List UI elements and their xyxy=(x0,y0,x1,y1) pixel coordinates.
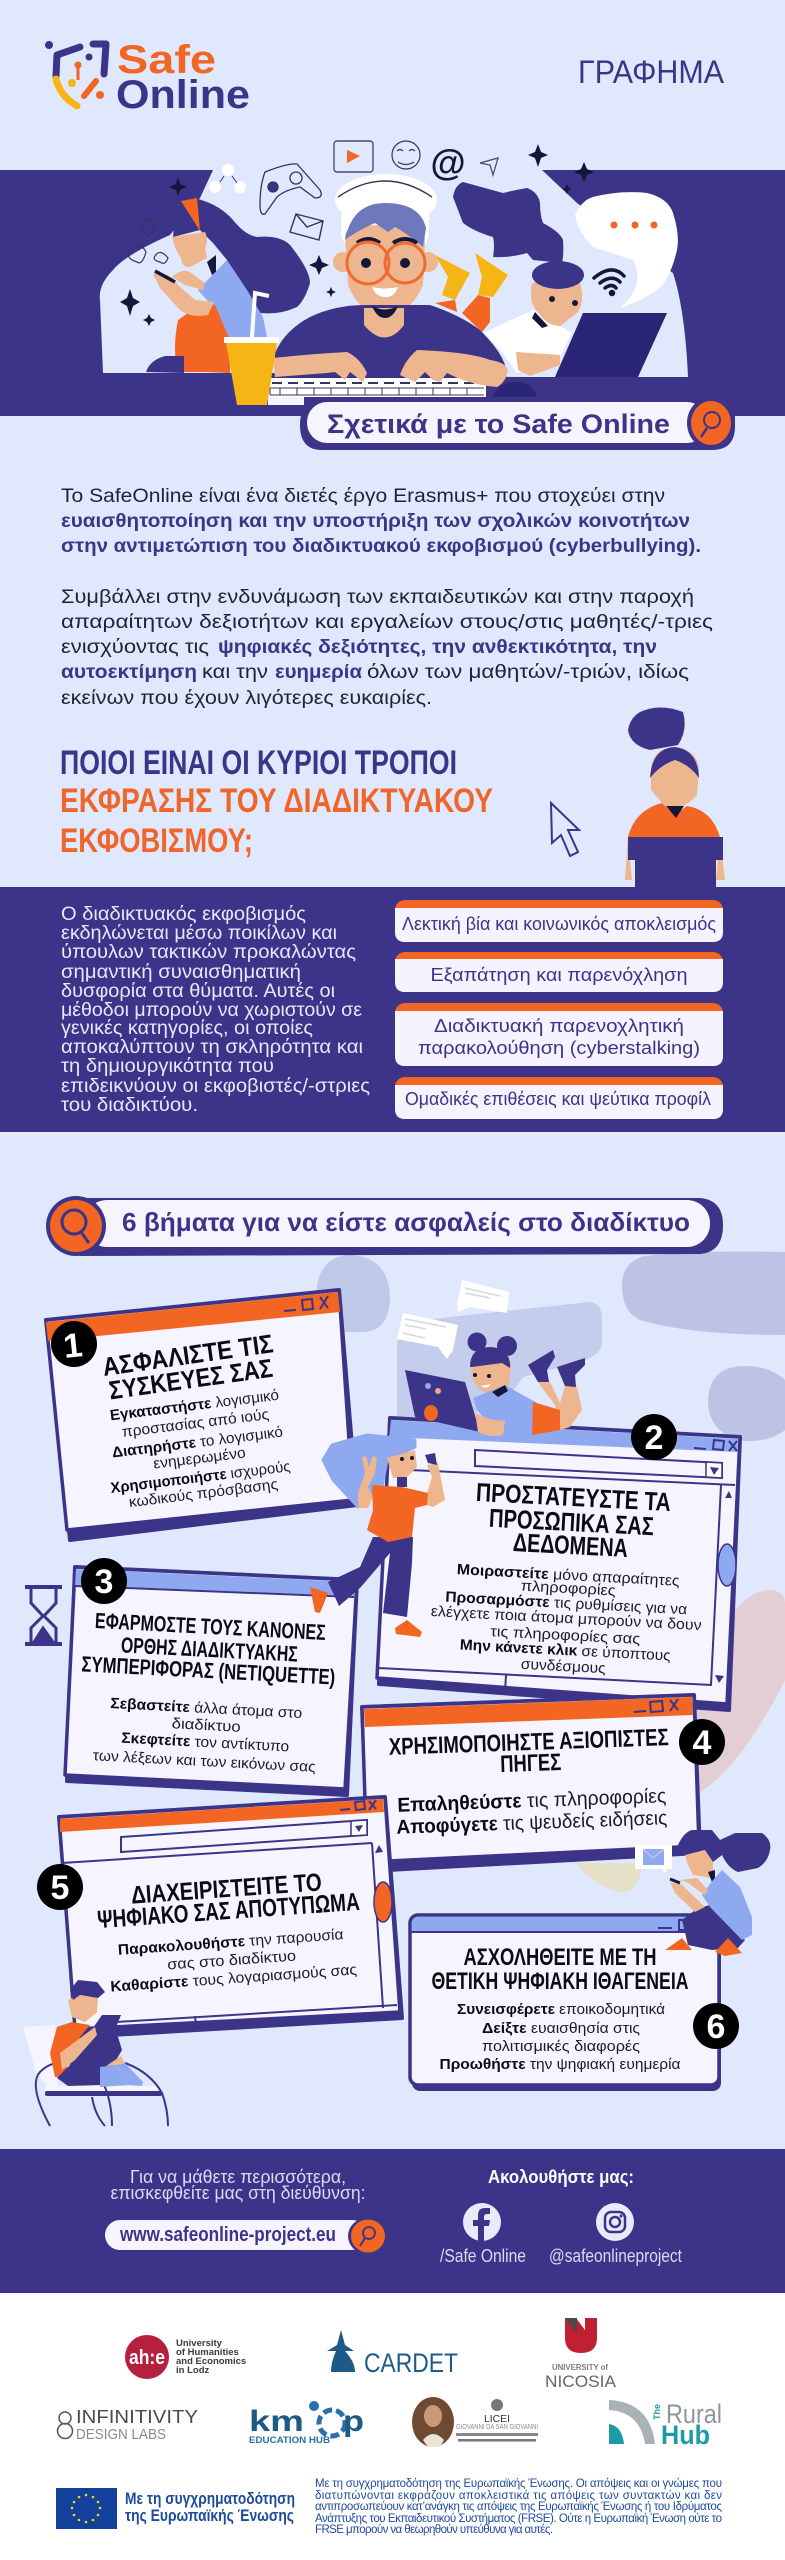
number badge 6: 6 xyxy=(707,2008,725,2046)
card: cyberstalking: Διαδικτυακή παρενοχλητική xyxy=(434,1016,684,1036)
panel: cyberbullying forms band xyxy=(0,887,785,1132)
logo: University of Nicosia xyxy=(545,2318,617,2391)
logo: KMOP: EDUCATION HUB xyxy=(249,2435,331,2445)
explanation text: τη δημιουργικότητα που xyxy=(61,1056,274,1077)
logo: AHE xyxy=(125,2335,246,2379)
icon: cursor arrow xyxy=(551,803,579,856)
white partner area xyxy=(0,2293,785,2560)
heading: main forms of cyberbullying: ΕΚΦΡΑΣΗΣ ΤΟΥ ΔΙΑΔΙΚΤΥΑΚΟΥ xyxy=(60,782,493,820)
card: cyberstalking: παρακολούθηση (cyberstalking) xyxy=(418,1038,700,1058)
logo: Licei Giovanni da San Giovanni: LICEI xyxy=(484,2414,510,2425)
body text: των λέξεων και των εικόνων σας xyxy=(92,1747,316,1776)
text: follow us: Ακολουθήστε μας: xyxy=(488,2167,634,2187)
card: cyberstalking xyxy=(395,1003,723,1066)
number badge 4: 4 xyxy=(693,1724,712,1762)
body text: κωδικούς πρόσβασης xyxy=(128,1476,279,1511)
EU co-funding emblem xyxy=(56,2488,295,2529)
social handles xyxy=(440,2246,682,2266)
title xyxy=(475,1477,672,1563)
number badge 5 xyxy=(37,1864,83,1910)
drink cup xyxy=(224,293,279,405)
person: girl standing with phone xyxy=(310,1435,445,1637)
section heading: six steps: 6 βήματα για να είστε ασφαλείς στο διαδίκτυο xyxy=(122,1207,690,1237)
logo: AHE: in Lodz xyxy=(176,2365,209,2376)
logo: The Rural Hub: The xyxy=(652,2404,662,2420)
icon: smiley xyxy=(392,141,420,169)
logo: AHE: of Humanities xyxy=(176,2347,239,2358)
body text: πολιτισμικές διαφορές xyxy=(482,2038,640,2055)
title: ΧΡΗΣΙΜΟΠΟΙΗΣΤΕ ΑΞΙΟΠΙΣΤΕΣ xyxy=(388,1724,669,1761)
intro text block: εκείνων που έχουν λιγότερες ευκαιρίες. xyxy=(61,688,432,709)
body text: Συνεισφέρετε εποικοδομητικά xyxy=(457,2001,665,2018)
body text: πληροφορίες xyxy=(520,1578,616,1599)
website search bar xyxy=(105,2218,386,2254)
social handles: /Safe Online xyxy=(440,2246,526,2266)
number badge 6 xyxy=(693,2003,739,2049)
logo: CARDET xyxy=(327,2330,458,2378)
logo: KMOP: km xyxy=(249,2405,304,2438)
title: ΕΦΑΡΜΟΣΤΕ ΤΟΥΣ ΚΑΝΟΝΕΣ xyxy=(94,1608,326,1645)
intro text block: αυτοεκτίμηση xyxy=(61,662,197,683)
body text: Μην κάνετε κλικ σε ύποπτους xyxy=(459,1636,671,1665)
explanation text: γενικές κατηγορίες, οι οποίες xyxy=(61,1018,313,1039)
intro text block: Συμβάλλει στην ενδυνάμωση των εκπαιδευτικών και στην παροχή xyxy=(61,587,694,608)
intro text block: και την xyxy=(202,662,268,683)
title: ΠΡΟΣΤΑΤΕΥΣΤΕ ΤΑ xyxy=(475,1477,672,1517)
body text: Παρακολουθήστε την παρουσία xyxy=(117,1926,344,1959)
icon: hourglass xyxy=(25,1587,62,1644)
body text: Χρησιμοποιήστε ισχυρούς xyxy=(110,1458,291,1497)
text: learn more: Για να μάθετε περισσότερα, xyxy=(130,2167,346,2187)
logo: CARDET: CARDET xyxy=(364,2348,458,2378)
EU co-funding emblem: Με τη συγχρηματοδότηση xyxy=(125,2489,295,2508)
EU co-funding emblem: της Ευρωπαϊκής Ένωσης xyxy=(125,2506,294,2525)
logo: Infinitivity Design Labs: DESIGN LABS xyxy=(76,2426,166,2443)
title: ΟΡΘΗΣ ΔΙΑΔΙΚΤΥΑΚΗΣ xyxy=(120,1632,298,1667)
heading: main forms of cyberbullying: ΕΚΦΟΒΙΣΜΟΥ; xyxy=(60,822,253,860)
person: girl sitting with phone and message xyxy=(635,1830,770,1956)
body text: Προσαρμόστε τις ρυθμίσεις για να xyxy=(445,1589,688,1618)
explanation text: επιδεικνύουν οι εκφοβιστές/-στριες xyxy=(61,1076,370,1097)
explanation text: αποκαλύπτουν τη σκληρότητα και xyxy=(61,1037,363,1058)
icon: instagram xyxy=(596,2203,634,2241)
window 2: protect personal data xyxy=(377,1418,740,1710)
central boy at keyboard xyxy=(268,174,537,405)
explanation text: του διαδικτύου. xyxy=(61,1095,198,1116)
number badge 3 xyxy=(81,1558,127,1604)
body text: Καθαρίστε τους λογαριασμούς σας xyxy=(110,1961,357,1996)
body text: ενημερωμένο xyxy=(152,1444,247,1473)
body text xyxy=(92,1695,316,1776)
body text xyxy=(430,1561,702,1677)
body text: προστασίας από ιούς xyxy=(121,1406,270,1441)
card: group attacks xyxy=(395,1077,723,1119)
logo: The Rural Hub: Hub xyxy=(661,2420,710,2450)
logo: AHE: University xyxy=(176,2338,223,2349)
title xyxy=(100,1328,275,1405)
intro text block: ψηφιακές δεξιότητες, την ανθεκτικότητα, την xyxy=(218,637,657,658)
keyboard xyxy=(268,378,486,405)
body text: Σεβαστείτε άλλα άτομα στο xyxy=(110,1695,303,1722)
social handles: @safeonlineproject xyxy=(549,2246,682,2266)
intro text block: Το SafeOnline είναι ένα διετές έργο Erasmus+ που στοχεύει στην xyxy=(61,486,665,507)
text: learn more xyxy=(110,2167,366,2203)
body text xyxy=(110,1926,357,1996)
number badge 5: 5 xyxy=(51,1869,69,1907)
intro text block: απαραίτητων δεξιοτήτων και εργαλείων στους/στις μαθητές/-τριες xyxy=(61,612,713,633)
explanation text xyxy=(61,904,370,1116)
title: ΣΥΜΠΕΡΙΦΟΡΑΣ (NETIQUETTE) xyxy=(81,1651,336,1690)
explanation text: μέθοδοι μπορούν να χωριστούν σε xyxy=(61,1000,363,1021)
logo: KMOP: p xyxy=(343,2405,364,2438)
title: ΣΥΣΚΕΥΕΣ ΣΑΣ xyxy=(107,1353,275,1405)
intro text block: ευαισθητοποίηση και την υποστήριξη των σχολικών κοινοτήτων xyxy=(61,511,690,532)
card: deception xyxy=(395,952,723,992)
body text: Εγκαταστήστε λογισμικό xyxy=(109,1387,280,1424)
number badge 1 xyxy=(51,1321,97,1367)
text: learn more: επισκεφθείτε μας στη διεύθυνση: xyxy=(110,2183,366,2203)
body text xyxy=(396,1785,668,1839)
explanation text: σημαντική συναισθηματική xyxy=(61,962,301,983)
window 5: digital footprint xyxy=(59,1797,402,2037)
explanation text: δυσφορία στα θύματα. Αυτές οι xyxy=(61,981,335,1002)
title: ΘΕΤΙΚΗ ΨΗΦΙΑΚΗ ΙΘΑΓΕΝΕΙΑ xyxy=(432,1968,688,1995)
number badge 2: 2 xyxy=(645,1419,663,1457)
search bar heading: about xyxy=(300,397,735,450)
heading: main forms of cyberbullying: ΠΟΙΟΙ ΕΙΝΑΙ ΟΙ ΚΥΡΙΟΙ ΤΡΟΠΟΙ xyxy=(60,744,457,782)
logo: The Rural Hub: Rural xyxy=(666,2399,722,2429)
logo: AHE: ah:e xyxy=(129,2347,165,2369)
window 4: reliable sources xyxy=(362,1695,700,1871)
body text: Δείξτε ευαισθησία στις xyxy=(482,2020,640,2037)
title: ΔΙΑΧΕΙΡΙΣΤΕΙΤΕ ΤΟ xyxy=(130,1868,323,1910)
intro text block: ευημερία xyxy=(275,662,362,683)
icon: facebook xyxy=(463,2203,501,2241)
body text xyxy=(440,2001,681,2073)
background blobs xyxy=(316,1252,785,1892)
logo: Licei Giovanni da San Giovanni xyxy=(412,2397,538,2447)
body text: Επαληθεύστε τις πληροφορίες xyxy=(397,1785,667,1817)
logo: Safe Online: Online xyxy=(116,73,250,117)
title: ΔΕΔΟΜΕΝΑ xyxy=(512,1527,629,1563)
number badge 4 xyxy=(679,1719,725,1765)
logo: Safe Online: Safe xyxy=(117,38,216,82)
explanation text: εκδηλώνεται μέσω ποικίλων και xyxy=(61,923,337,944)
window 1: secure devices xyxy=(46,1290,357,1540)
disclaimer text xyxy=(315,2478,722,2536)
logo: University of Nicosia: UNIVERSITY of xyxy=(552,2363,608,2372)
footer band xyxy=(0,2149,785,2293)
icon: game controller xyxy=(260,164,321,214)
person: girl lying on laptop xyxy=(397,1280,585,1437)
logo: University of Nicosia: NICOSIA xyxy=(545,2372,617,2391)
body text: διαδίκτυο xyxy=(171,1715,241,1736)
logo: Infinitivity Design Labs xyxy=(58,2407,198,2443)
woman at laptop xyxy=(625,708,725,887)
label: document type: ΓΡΑΦΗΜΑ xyxy=(578,54,725,90)
title: ΨΗΦΙΑΚΟ ΣΑΣ ΑΠΟΤΥΠΩΜΑ xyxy=(96,1888,361,1934)
intro text block: στην αντιμετώπιση του διαδικτυακού εκφοβισμού (cyberbullying). xyxy=(61,536,701,557)
title: ΑΣΦΑΛΙΣΤΕ ΤΙΣ xyxy=(100,1328,275,1382)
icon: paper plane xyxy=(480,158,498,175)
logo: Licei Giovanni da San Giovanni: GIOVANNI DA SAN GIOVANNI xyxy=(456,2424,538,2431)
body text: σας στο διαδίκτυο xyxy=(167,1948,297,1973)
icon: share nodes xyxy=(209,164,246,193)
title: ΑΣΧΟΛΗΘΕΙΤΕ ΜΕ ΤΗ xyxy=(464,1944,656,1971)
card: verbal violence xyxy=(395,900,723,942)
left girl with phone xyxy=(129,198,310,373)
icon: wifi xyxy=(594,270,624,294)
logo: AHE: and Economics xyxy=(176,2356,246,2367)
logo: The Rural Hub xyxy=(609,2399,722,2450)
window 6: positive digital citizenship xyxy=(410,1915,721,2091)
body text: τις πληροφορίες σας xyxy=(490,1623,641,1648)
number badge 1: 1 xyxy=(61,1326,84,1366)
title xyxy=(81,1608,336,1690)
explanation text: Ο διαδικτυακός εκφοβισμός xyxy=(61,904,306,925)
card: group attacks: Ομαδικές επιθέσεις και ψεύτικα προφίλ xyxy=(405,1089,711,1109)
disclaimer text: αντιπροσωπεύουν κατ’ανάγκη τις απόψεις της Ευρωπαϊκής Ένωσης ή του Ιδρύματος xyxy=(315,2501,722,2513)
disclaimer text: Ανάπτυξης του Εκπαιδευτικού Συστήματος (FRSE). Ούτε η Ευρωπαϊκή Ένωση ούτε το xyxy=(315,2513,722,2525)
icon: at sign: @ xyxy=(430,142,466,183)
number badge 3: 3 xyxy=(95,1563,113,1601)
icon: play button xyxy=(334,141,373,172)
disclaimer text: Με τη συγχρηματοδότηση της Ευρωπαϊκής Ένωσης. Οι απόψεις και οι γνώμες που xyxy=(315,2478,722,2490)
logo: Safe Online xyxy=(45,38,250,117)
speech bubble xyxy=(575,192,678,308)
body text: Σκεφτείτε τον αντίκτυπο xyxy=(121,1730,290,1755)
search bar heading: about: Σχετικά με το Safe Online xyxy=(327,409,670,439)
intro text block: όλων των μαθητών/-τριών, ιδίως xyxy=(367,662,689,683)
icon: envelope xyxy=(290,214,323,240)
person: boy sitting on chair with tablet xyxy=(23,1980,168,2126)
website search bar: www.safeonline-project.eu xyxy=(119,2224,336,2246)
intro text block xyxy=(61,486,713,709)
body text: Μοιραστείτε μόνο απαραίτητες xyxy=(456,1561,680,1590)
heading: main forms of cyberbullying xyxy=(60,744,493,860)
body text xyxy=(109,1387,291,1511)
title xyxy=(432,1944,688,1995)
disclaimer text: διατυπώνονται εκφράζουν αποκλειστικά τις απόψεις των συντακτών και δεν xyxy=(315,2490,722,2502)
title xyxy=(388,1724,669,1778)
window 3: netiquette xyxy=(65,1567,357,1795)
logo: KMOP xyxy=(249,2401,364,2445)
intro text block: ενισχύοντας τις xyxy=(61,637,209,658)
card: deception: Εξαπάτηση και παρενόχληση xyxy=(430,965,688,985)
body text: συνδέσμους xyxy=(520,1656,606,1677)
body text: Αποφύγετε τις ψευδείς ειδήσεις xyxy=(396,1807,668,1839)
title xyxy=(96,1868,361,1934)
body text: Προωθήστε την ψηφιακή ευημερία xyxy=(440,2056,681,2073)
body text: ελέγχετε ποια άτομα μπορούν να δουν xyxy=(430,1603,702,1634)
logo: Infinitivity Design Labs: INFINITIVITY xyxy=(76,2407,198,2427)
right girl lying with laptop xyxy=(435,182,667,377)
title: ΠΗΓΕΣ xyxy=(500,1749,562,1778)
hero banner illustration xyxy=(0,141,785,416)
card: verbal violence: Λεκτική βία και κοινωνικός αποκλεισμός xyxy=(402,914,716,934)
section heading: six steps xyxy=(46,1196,723,1256)
body text: Διατηρήστε το λογισμικό xyxy=(111,1424,284,1461)
sparkles xyxy=(120,144,594,326)
number badge 2 xyxy=(631,1414,677,1460)
explanation text: ύπουλων τακτικών προκαλώντας xyxy=(61,942,356,963)
disclaimer text: FRSE μπορούν να θεωρηθούν υπεύθυνα για αυτές. xyxy=(315,2524,553,2536)
title: ΠΡΟΣΩΠΙΚΑ ΣΑΣ xyxy=(488,1503,655,1541)
